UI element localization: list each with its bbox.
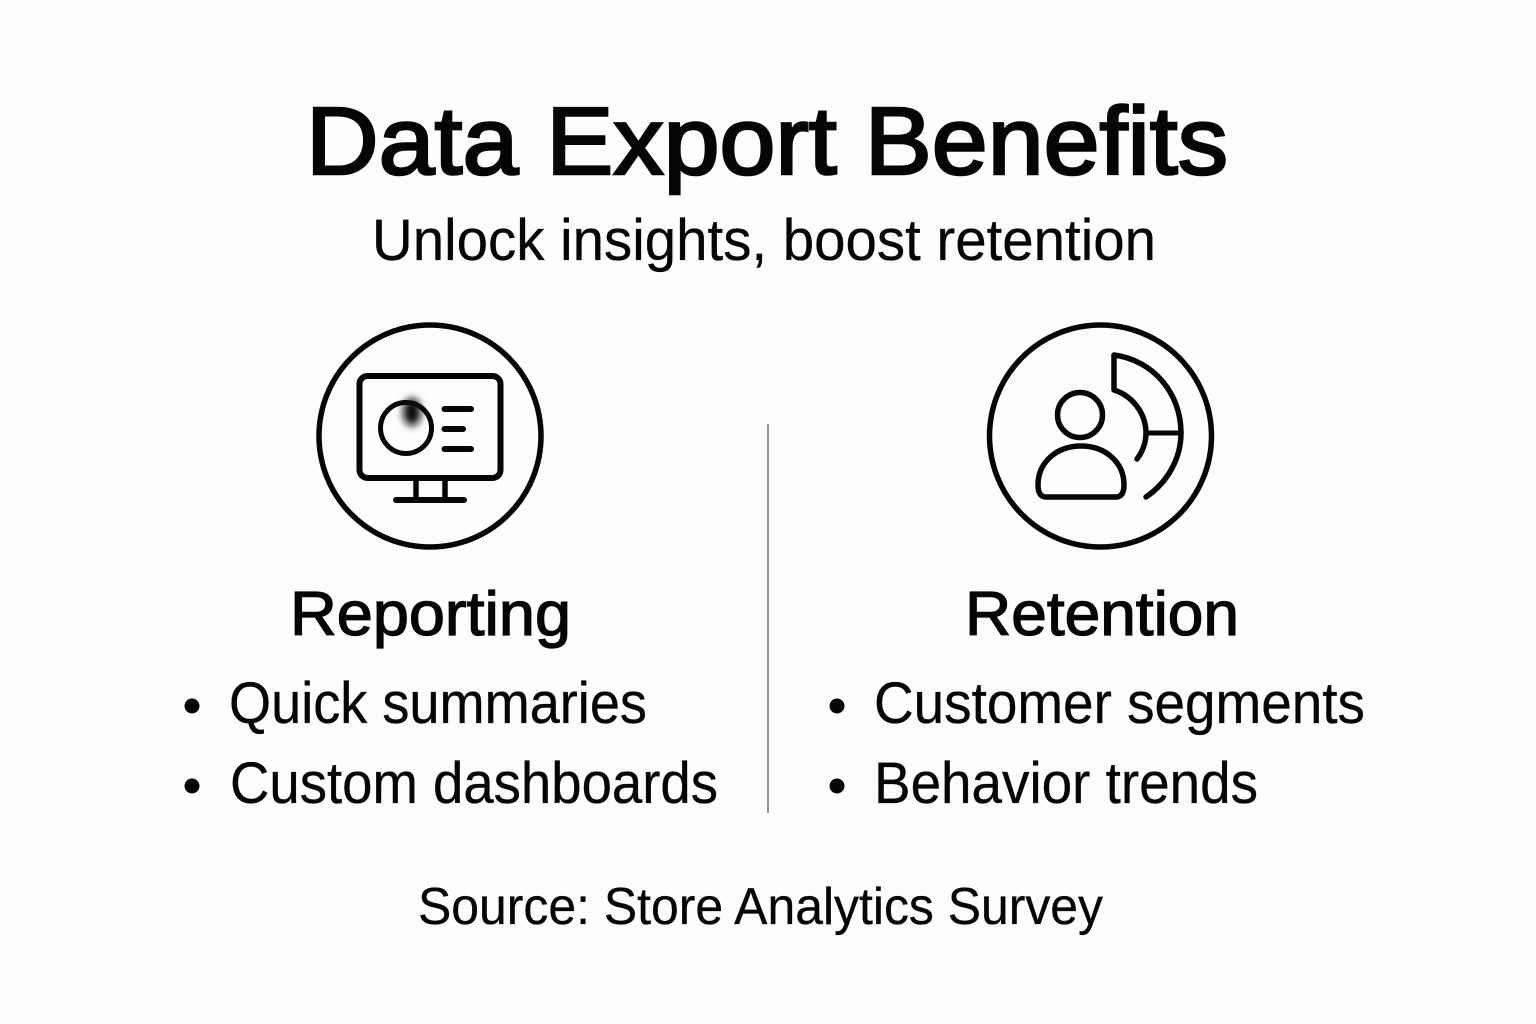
list: retention benefits: Customer segments — [874, 671, 1365, 736]
list: retention benefits: Behavior trends — [874, 751, 1258, 816]
list: reporting benefits: Quick summaries — [229, 671, 647, 736]
source note: Source: Store Analytics Survey — [418, 878, 1103, 936]
list: retention benefits — [830, 671, 1365, 816]
subtitle: Unlock insights, boost retention — [372, 208, 1156, 273]
title: Data Export Benefits — [306, 88, 1228, 195]
list: reporting benefits — [184, 671, 718, 816]
icon: reporting monitor — [319, 325, 541, 547]
list: reporting benefits: Custom dashboards — [230, 751, 718, 816]
heading: reporting: Reporting — [290, 580, 571, 649]
heading: retention: Retention — [965, 580, 1239, 649]
icon: retention person and gauge — [990, 325, 1212, 547]
